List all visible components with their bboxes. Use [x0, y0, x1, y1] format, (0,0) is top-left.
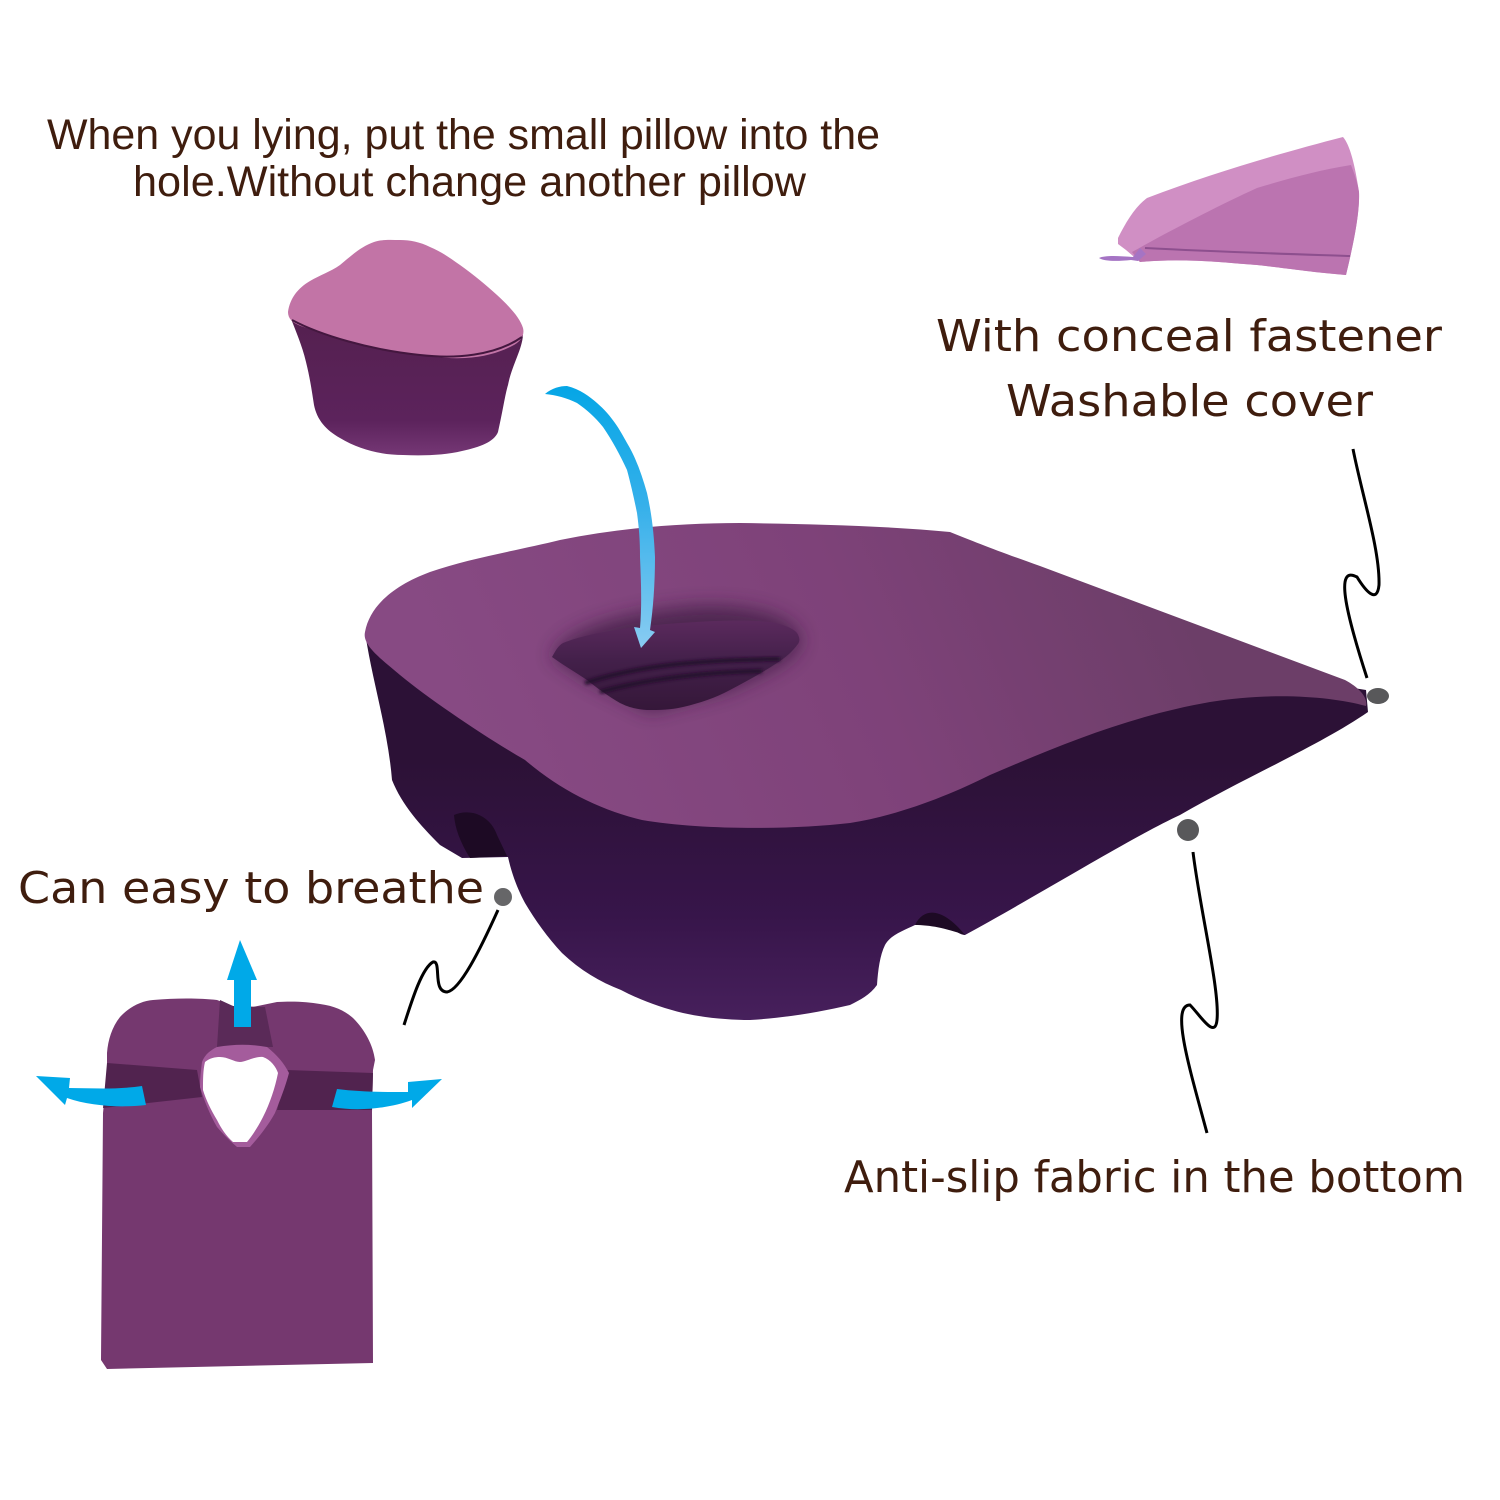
callout dot: fastener: [1367, 688, 1389, 704]
instruction text: When you lying, put the small pillow into the: [47, 111, 880, 159]
hole shadow: [552, 606, 800, 712]
callout dot: anti-slip: [1177, 819, 1199, 841]
zipper wedge: [1099, 137, 1359, 275]
folded pillow: [101, 998, 375, 1369]
breathe label: Can easy to breathe: [18, 863, 484, 914]
arrow: right: [332, 1079, 442, 1109]
callout dot: breathe: [494, 888, 512, 906]
callout line: fastener: [1345, 449, 1379, 678]
arrow: left: [36, 1076, 146, 1106]
small insert pillow: [288, 240, 523, 455]
zipper label: Washable cover: [1006, 376, 1374, 427]
callout line: anti-slip: [1182, 852, 1217, 1133]
callout line: breathe: [404, 910, 498, 1025]
cushion side: [365, 600, 1368, 1020]
main wedge cushion: [365, 523, 1368, 1020]
zipper label: With conceal fastener: [936, 311, 1443, 362]
hole stripes: [585, 659, 780, 692]
zipper label: [936, 311, 1443, 427]
cushion top: [365, 523, 1366, 828]
cushion hole: [552, 620, 799, 710]
cushion notch right: [915, 913, 965, 935]
instruction text: [47, 111, 880, 206]
instruction text: hole.Without change another pillow: [133, 158, 807, 206]
cushion notch left: [454, 812, 507, 858]
blue arrow into hole: [545, 386, 655, 648]
arrow: up: [227, 940, 257, 1027]
anti-slip label: Anti-slip fabric in the bottom: [844, 1152, 1465, 1203]
